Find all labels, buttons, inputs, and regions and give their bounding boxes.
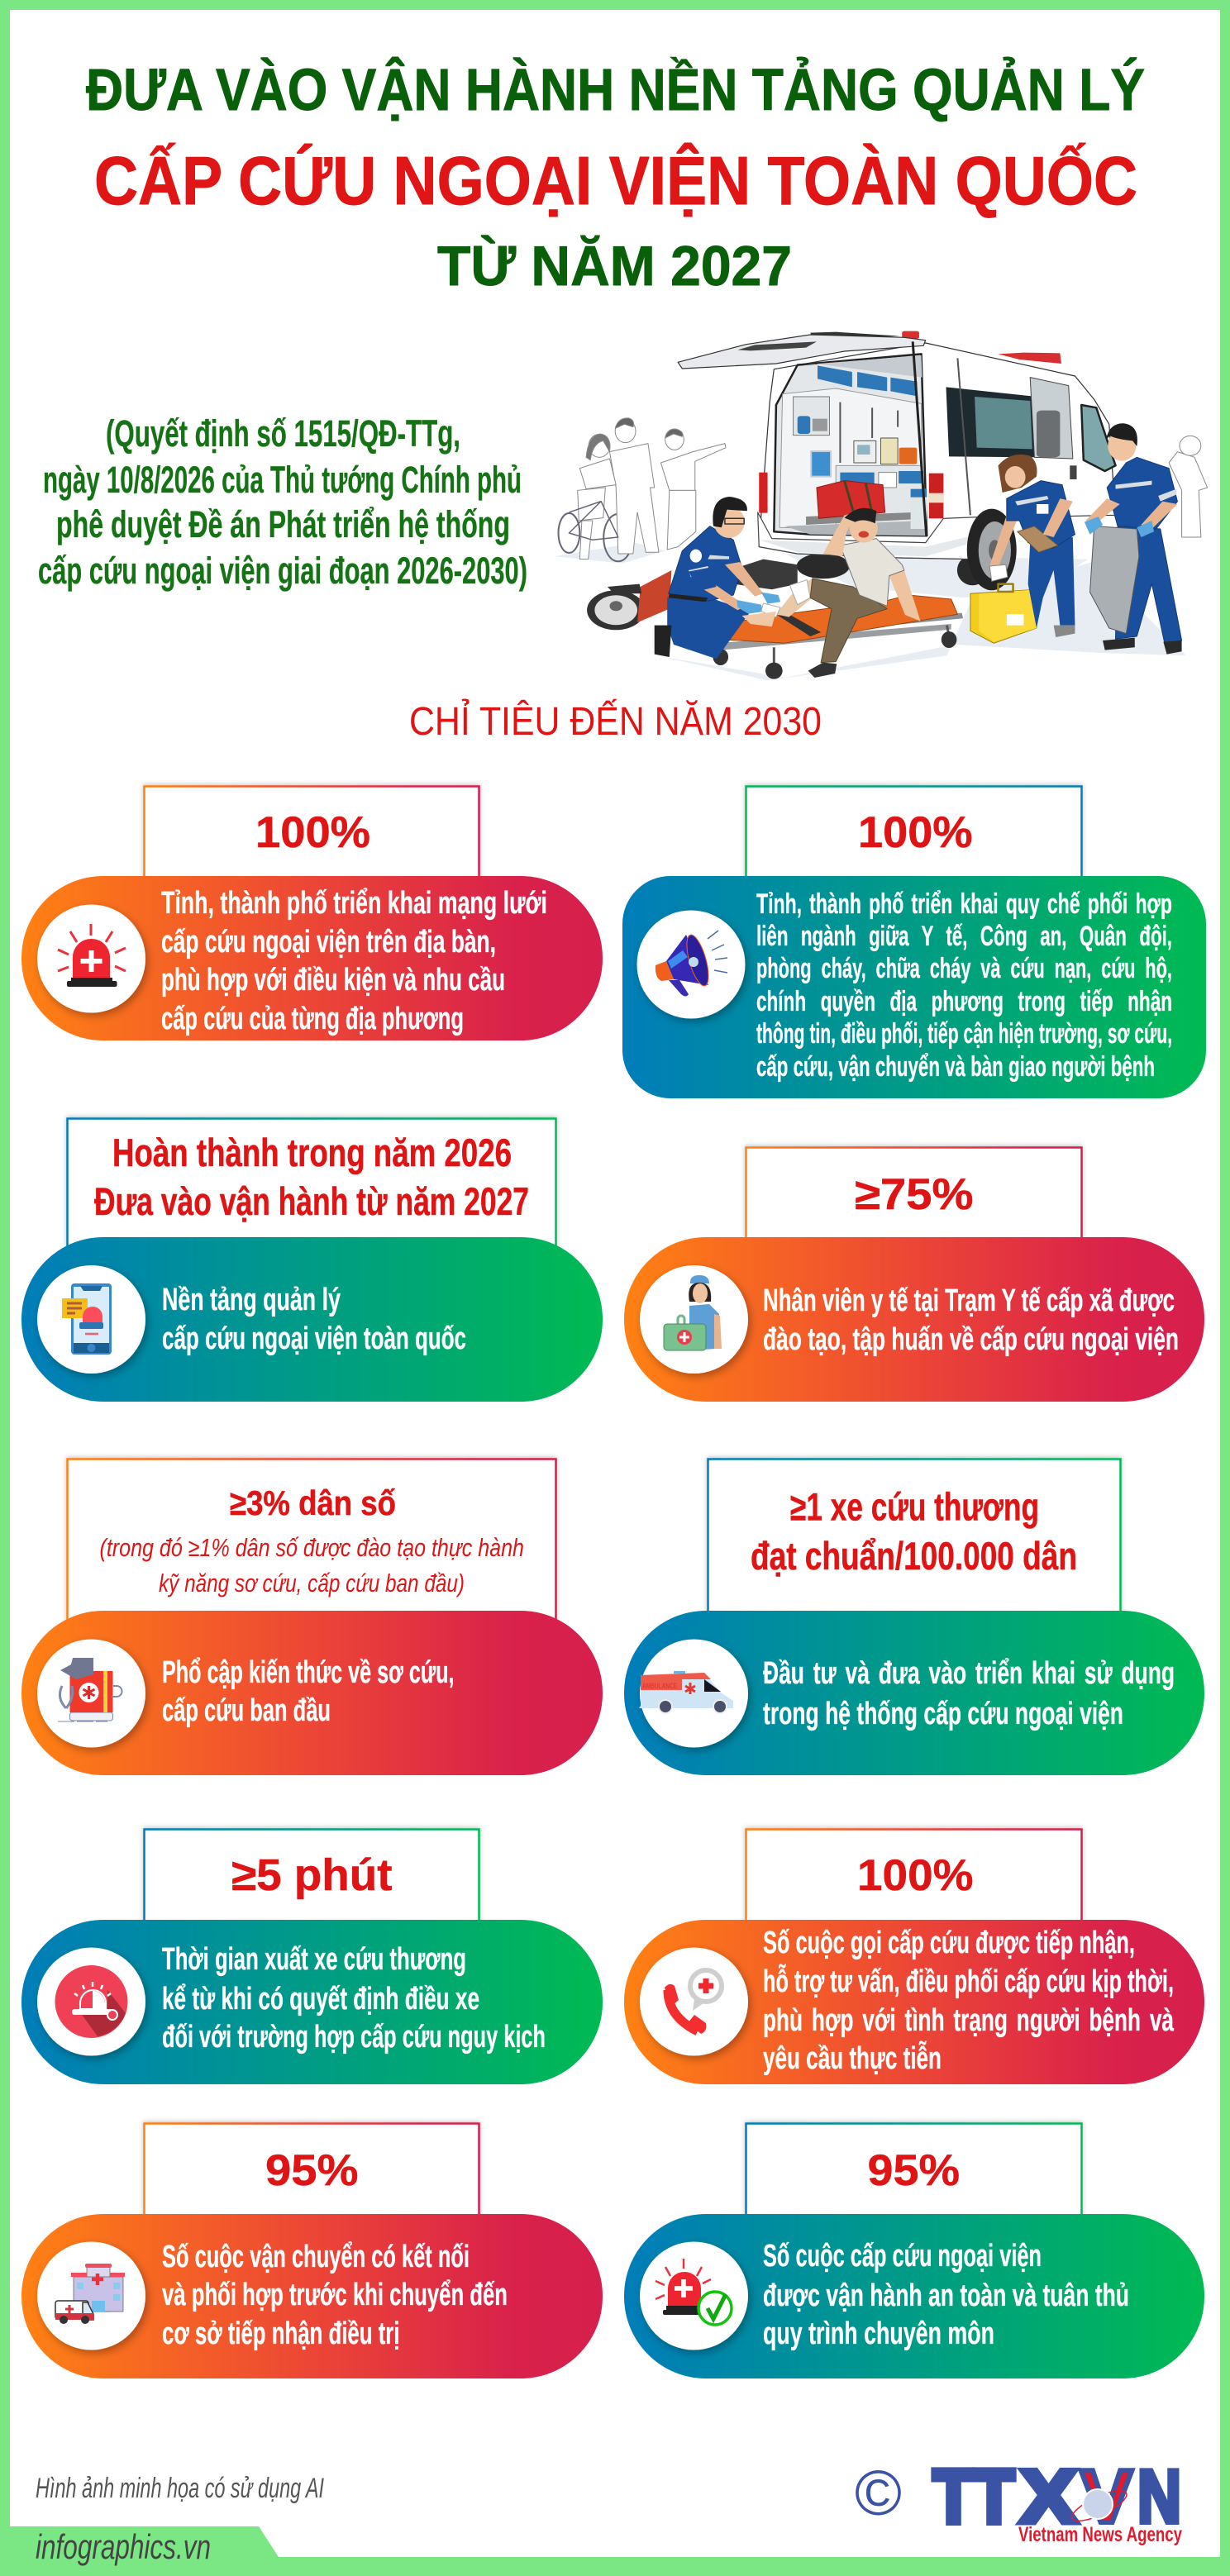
logo: TTXVN: X [1020,2455,1077,2539]
pill [21,1237,603,1402]
logo: TTXVN: V [1080,2455,1132,2539]
panel: management platform [21,1119,603,1402]
icon: ambulance: AMBULANCE [642,1682,677,1690]
description [763,1926,1175,2076]
icon: phone and medical bubble [640,1947,748,2056]
label box [708,1459,1121,1628]
value: đạt chuẩn/100.000 dân [751,1534,1077,1578]
label box [746,2124,1081,2231]
panel: dispatch time [21,1830,603,2084]
description: Tỉnh, thành phố triển khai mạng lưới [161,886,547,921]
value: Đưa vào vận hành từ năm 2027 [94,1179,529,1223]
label box [144,1830,479,1937]
copyright symbol: © [855,2458,902,2529]
description: phù hợp với điều kiện và nhu cầu [161,963,505,998]
decision reference text: ngày 10/8/2026 của Thủ tướng Chính phủ [43,459,522,501]
label box [746,1147,1081,1255]
description: đối với trường hợp cấp cứu nguy kịch [162,2020,546,2055]
first aid case [970,584,1037,643]
description: Phổ cập kiến thức về sơ cứu, [162,1655,455,1690]
logo: TTXVN: TT [933,2455,1014,2539]
footer tab: infographics.vn [36,2527,211,2566]
description: cấp cứu ngoại viện toàn quốc [162,1321,466,1356]
pill [21,2214,603,2378]
value: 100% [857,1851,974,1900]
description [756,888,1172,1083]
value: 95% [868,2146,960,2195]
pill [624,1237,1204,1402]
injured man [742,508,920,678]
section heading: CHỈ TIÊU ĐẾN NĂM 2030 [409,698,822,744]
description: cấp cứu của từng địa phương [161,1002,464,1036]
label box [746,1830,1081,1937]
paramedic woman [989,455,1075,637]
icon: phone alert [37,1265,145,1374]
paramedic kneeling [655,497,780,659]
label box [68,1459,555,1628]
pill [21,876,603,1040]
label box [144,787,479,894]
value: 95% [265,2146,359,2195]
ambulance [678,331,1116,590]
logo: TTXVN: N [1137,2455,1181,2539]
panel: emergency calls [624,1830,1204,2084]
pill [624,2214,1204,2378]
value: ≥1 xe cứu thương [790,1484,1039,1529]
decision reference text: phê duyệt Đề án Phát triển hệ thống [56,503,510,545]
icon: megaphone [636,911,746,1018]
description [162,1283,466,1356]
icon: hospital and ambulance [37,2241,145,2350]
note: AI illustration: Hình ảnh minh họa có sử dụng AI [36,2473,324,2504]
label box [68,1119,555,1255]
panel: 100% network [21,787,603,1040]
value: (trong đó ≥1% dân số được đào tạo thực hành [99,1533,524,1562]
label box [746,787,1081,894]
illustration: ambulance scene [554,331,1208,680]
icon: first aid book [37,1640,145,1747]
description: Nền tảng quản lý [162,1283,341,1317]
description: kể từ khi có quyết định điều xe [162,1982,479,2017]
icon: siren [37,904,145,1013]
description [763,1656,1175,1731]
logo: TTXVN [933,2455,1182,2546]
description [763,1283,1179,1357]
panel: 95% transport [21,2124,603,2378]
decision reference text: (Quyết định số 1515/QĐ-TTg, [106,412,460,455]
value [751,1484,1077,1578]
description [162,1942,546,2055]
panel: 100% coordination [622,787,1206,1098]
description: yêu cầu thực tiễn [763,2040,942,2076]
pill [622,876,1206,1098]
value: Hoàn thành trong năm 2026 [112,1131,512,1174]
description [763,2239,1129,2351]
value [94,1131,529,1223]
pill [624,1611,1204,1775]
description [161,886,547,1036]
value: ≥3% dân số [230,1483,396,1522]
value: 100% [858,808,972,857]
panel: 95% safe operation [624,2124,1204,2378]
paramedic man with board [1085,423,1182,655]
description [162,1655,455,1728]
description: cấp cứu ban đầu [162,1693,331,1728]
value [99,1483,524,1598]
pill [624,1920,1204,2084]
value: 100% [255,808,370,857]
stretcher [710,595,963,679]
description [162,2240,508,2351]
value: ≥5 phút [231,1850,393,1900]
description: quy trình chuyên môn [763,2316,994,2351]
label box [144,2124,479,2231]
panel: ambulances per population [624,1459,1204,1775]
value: kỹ năng sơ cứu, cấp cứu ban đầu) [159,1569,465,1598]
icon: siren with check [640,2241,748,2350]
icon: nurse [640,1265,748,1374]
panel: first aid knowledge [21,1459,603,1775]
icon: siren with clock [37,1947,145,2056]
description: cơ sở tiếp nhận điều trị [162,2316,400,2351]
title [86,57,1145,298]
title: TỪ NĂM 2027 [437,235,792,298]
description: Số cuộc cấp cứu ngoại viện [763,2239,1042,2274]
description: và phối hợp trước khi chuyển đến [162,2278,508,2312]
motorbike [587,559,798,630]
icon: ambulance [639,1640,748,1747]
value: ≥75% [855,1170,974,1219]
description: Thời gian xuất xe cứu thương [162,1942,466,1977]
description: cấp cứu ngoại viện trên địa bàn, [161,925,496,959]
pill [21,1611,603,1775]
description: Số cuộc vận chuyển có kết nối [162,2240,470,2274]
panel: medical staff trained [624,1147,1204,1402]
bystanders [558,418,1208,561]
decision reference text [38,412,527,592]
decision reference text: cấp cứu ngoại viện giai đoạn 2026-2030) [38,550,527,592]
pill [21,1920,603,2084]
